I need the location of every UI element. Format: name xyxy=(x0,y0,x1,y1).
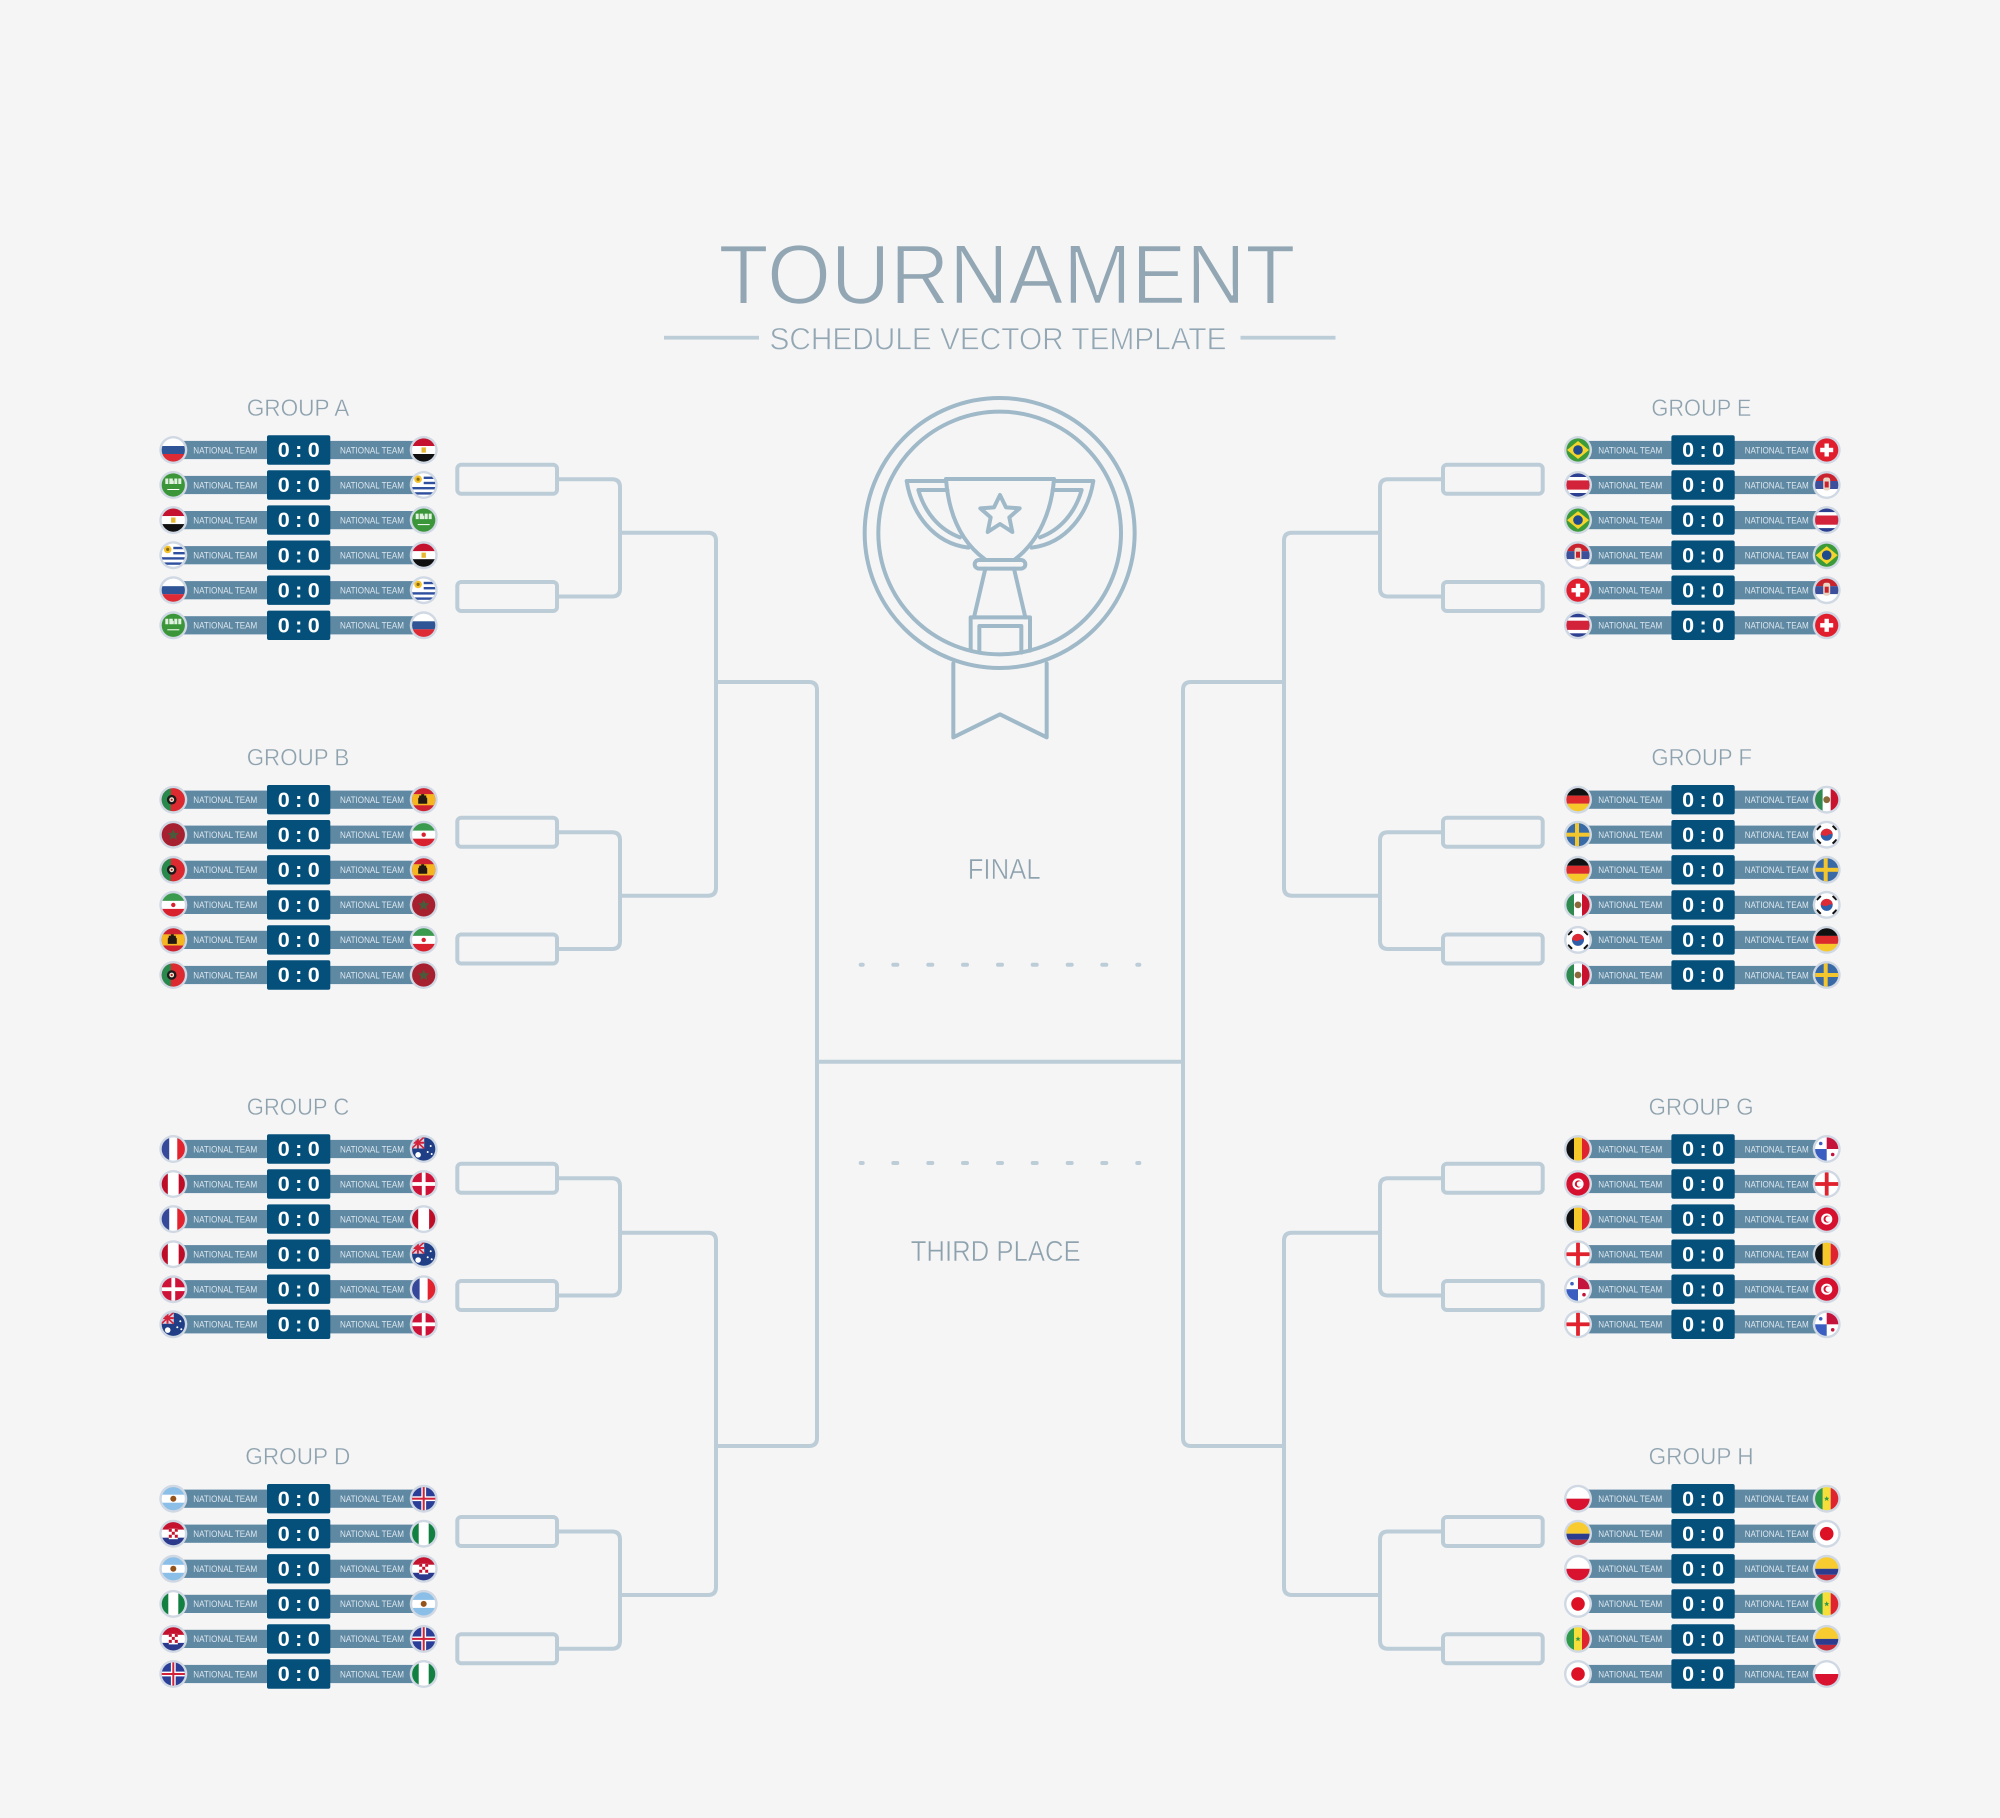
match row 2: NATIONAL TEAM xyxy=(1598,830,1662,840)
match row 2: NATIONAL TEAM xyxy=(193,480,257,490)
match row 6: NATIONAL TEAM xyxy=(1745,1669,1809,1679)
match row 5: 0 : 0 xyxy=(1682,578,1724,602)
match row 2: NATIONAL TEAM xyxy=(193,1529,257,1539)
match row 2 xyxy=(1564,1169,1841,1199)
match row 2: NATIONAL TEAM xyxy=(1598,1529,1662,1539)
match row 1: NATIONAL TEAM xyxy=(340,1144,404,1154)
match row 2: NATIONAL TEAM xyxy=(1745,480,1809,490)
match row 6: 0 : 0 xyxy=(1682,1662,1724,1686)
match row 6: NATIONAL TEAM xyxy=(340,1669,404,1679)
panel: group D xyxy=(159,1444,438,1689)
match row 5: NATIONAL TEAM xyxy=(1598,1634,1662,1644)
match row 2: 0 : 0 xyxy=(1682,1172,1724,1196)
match row 3: 0 : 0 xyxy=(1682,508,1724,532)
heading: group A: GROUP A xyxy=(247,395,349,422)
match row 5: NATIONAL TEAM xyxy=(1745,1634,1809,1644)
match row 3 xyxy=(159,855,438,884)
match row 2: NATIONAL TEAM xyxy=(1745,1529,1809,1539)
panel: group A xyxy=(159,395,438,640)
match row 1: NATIONAL TEAM xyxy=(1745,445,1809,455)
heading: group C: GROUP C xyxy=(247,1094,349,1121)
match row 1: 0 : 0 xyxy=(1682,1137,1724,1161)
match row 6: NATIONAL TEAM xyxy=(1598,621,1662,631)
match row 1: NATIONAL TEAM xyxy=(1598,1494,1662,1504)
match row 6: NATIONAL TEAM xyxy=(340,621,404,631)
match row 5: NATIONAL TEAM xyxy=(340,1284,404,1294)
match row 5: 0 : 0 xyxy=(278,1627,320,1651)
icon: trophy medal xyxy=(865,398,1135,737)
match row 3 xyxy=(1564,1204,1841,1234)
match row 1: 0 : 0 xyxy=(1682,438,1724,462)
match row 6: 0 : 0 xyxy=(278,613,320,637)
match row 2: NATIONAL TEAM xyxy=(340,480,404,490)
match row 4: 0 : 0 xyxy=(278,1242,320,1266)
match row 5 xyxy=(159,1624,438,1654)
match row 3: 0 : 0 xyxy=(1682,1207,1724,1231)
panel: group G xyxy=(1564,1094,1841,1339)
match row 3: 0 : 0 xyxy=(278,508,320,532)
match row 2: NATIONAL TEAM xyxy=(340,1179,404,1189)
match row 1: 0 : 0 xyxy=(1682,788,1724,812)
match row 4: NATIONAL TEAM xyxy=(340,550,404,560)
match row 4: 0 : 0 xyxy=(278,543,320,567)
match row 3 xyxy=(159,505,438,535)
match row 2: 0 : 0 xyxy=(278,473,320,497)
heading: group G: GROUP G xyxy=(1649,1094,1754,1121)
match row 5: NATIONAL TEAM xyxy=(340,585,404,595)
match row 5: NATIONAL TEAM xyxy=(1745,935,1809,945)
match row 4 xyxy=(1564,540,1841,570)
match row 3: NATIONAL TEAM xyxy=(1745,1564,1809,1574)
match row 5: NATIONAL TEAM xyxy=(1745,1284,1809,1294)
match row 6: NATIONAL TEAM xyxy=(340,1320,404,1330)
match row 3: NATIONAL TEAM xyxy=(1745,865,1809,875)
match row 1: NATIONAL TEAM xyxy=(193,795,257,805)
match row 5: NATIONAL TEAM xyxy=(1598,1284,1662,1294)
match row 4: 0 : 0 xyxy=(278,893,320,917)
match row 1 xyxy=(1564,435,1841,465)
match row 1: NATIONAL TEAM xyxy=(193,1494,257,1504)
heading: group B: GROUP B xyxy=(247,745,349,772)
match row 5: NATIONAL TEAM xyxy=(340,935,404,945)
match row 6: NATIONAL TEAM xyxy=(340,970,404,980)
match row 5: NATIONAL TEAM xyxy=(193,935,257,945)
match row 3: 0 : 0 xyxy=(1682,858,1724,882)
match row 2 xyxy=(159,1169,438,1199)
panel: group C xyxy=(159,1094,438,1339)
match row 4: NATIONAL TEAM xyxy=(1598,1249,1662,1259)
match row 6 xyxy=(159,960,438,990)
final dotted line xyxy=(861,963,1139,967)
match row 5: NATIONAL TEAM xyxy=(1598,935,1662,945)
match row 6: 0 : 0 xyxy=(1682,1312,1724,1336)
match row 3: NATIONAL TEAM xyxy=(193,1214,257,1224)
match row 2: 0 : 0 xyxy=(278,1522,320,1546)
match row 6: 0 : 0 xyxy=(278,1662,320,1686)
match row 4 xyxy=(1564,1589,1841,1619)
match row 3: 0 : 0 xyxy=(278,1207,320,1231)
panel: group F xyxy=(1564,745,1841,990)
third place dotted line xyxy=(861,1161,1139,1165)
match row 3: NATIONAL TEAM xyxy=(193,515,257,525)
match row 1: NATIONAL TEAM xyxy=(1745,1144,1809,1154)
match row 6: NATIONAL TEAM xyxy=(193,1320,257,1330)
match row 2: 0 : 0 xyxy=(1682,473,1724,497)
match row 4: NATIONAL TEAM xyxy=(340,900,404,910)
label: FINAL: FINAL xyxy=(968,854,1041,886)
match row 2: 0 : 0 xyxy=(278,1172,320,1196)
match row 3 xyxy=(1564,505,1841,535)
match row 5: 0 : 0 xyxy=(278,578,320,602)
match row 6: NATIONAL TEAM xyxy=(193,1669,257,1679)
match row 2 xyxy=(159,820,438,849)
match row 1: NATIONAL TEAM xyxy=(1745,795,1809,805)
match row 6 xyxy=(1564,960,1841,990)
match row 6 xyxy=(159,1310,438,1339)
match row 2: NATIONAL TEAM xyxy=(193,830,257,840)
match row 3: NATIONAL TEAM xyxy=(340,865,404,875)
match row 4: NATIONAL TEAM xyxy=(193,550,257,560)
match row 3: NATIONAL TEAM xyxy=(193,1564,257,1574)
match row 1: NATIONAL TEAM xyxy=(340,1494,404,1504)
match row 6: NATIONAL TEAM xyxy=(1745,1320,1809,1330)
match row 5: NATIONAL TEAM xyxy=(193,585,257,595)
match row 1: 0 : 0 xyxy=(278,788,320,812)
match row 2: NATIONAL TEAM xyxy=(1598,480,1662,490)
match row 4: NATIONAL TEAM xyxy=(193,900,257,910)
match row 4: NATIONAL TEAM xyxy=(1745,900,1809,910)
match row 1: 0 : 0 xyxy=(278,1137,320,1161)
match row 4 xyxy=(159,890,438,920)
match row 4: NATIONAL TEAM xyxy=(1598,900,1662,910)
match row 2: 0 : 0 xyxy=(278,823,320,847)
match row 1: NATIONAL TEAM xyxy=(1598,795,1662,805)
match row 6: NATIONAL TEAM xyxy=(1598,970,1662,980)
match row 1: NATIONAL TEAM xyxy=(193,445,257,455)
match row 6: 0 : 0 xyxy=(278,1312,320,1336)
match row 6 xyxy=(159,611,438,640)
match row 5 xyxy=(1564,1624,1841,1654)
match row 2: 0 : 0 xyxy=(1682,823,1724,847)
match row 5: 0 : 0 xyxy=(1682,1627,1724,1651)
match row 1: NATIONAL TEAM xyxy=(1745,1494,1809,1504)
match row 3: 0 : 0 xyxy=(278,1557,320,1581)
match row 3: NATIONAL TEAM xyxy=(193,865,257,875)
match row 4: NATIONAL TEAM xyxy=(1598,550,1662,560)
match row 3: NATIONAL TEAM xyxy=(1598,1564,1662,1574)
panel: group H xyxy=(1564,1444,1841,1689)
subtitle with side rules: SCHEDULE VECTOR TEMPLATE xyxy=(770,320,1226,356)
match row 1: NATIONAL TEAM xyxy=(1598,1144,1662,1154)
heading: group F: GROUP F xyxy=(1651,745,1752,772)
panel: group B xyxy=(159,745,438,990)
match row 2 xyxy=(1564,820,1841,849)
match row 6: 0 : 0 xyxy=(1682,963,1724,987)
match row 3: NATIONAL TEAM xyxy=(1598,865,1662,875)
match row 4: 0 : 0 xyxy=(1682,893,1724,917)
match row 1: NATIONAL TEAM xyxy=(340,795,404,805)
match row 5: 0 : 0 xyxy=(278,1277,320,1301)
match row 3: NATIONAL TEAM xyxy=(340,515,404,525)
match row 4: NATIONAL TEAM xyxy=(1745,1249,1809,1259)
match row 2: 0 : 0 xyxy=(1682,1522,1724,1546)
match row 3 xyxy=(159,1204,438,1234)
match row 1 xyxy=(159,1134,438,1164)
match row 1 xyxy=(1564,1134,1841,1164)
match row 2: NATIONAL TEAM xyxy=(193,1179,257,1189)
heading: group H: GROUP H xyxy=(1649,1444,1754,1471)
match row 5 xyxy=(159,1274,438,1304)
match row 4: 0 : 0 xyxy=(278,1592,320,1616)
match row 2: NATIONAL TEAM xyxy=(1745,830,1809,840)
match row 6: NATIONAL TEAM xyxy=(193,621,257,631)
match row 5: NATIONAL TEAM xyxy=(193,1634,257,1644)
match row 5: 0 : 0 xyxy=(1682,928,1724,952)
match row 3: NATIONAL TEAM xyxy=(340,1214,404,1224)
heading: group E: GROUP E xyxy=(1651,395,1751,422)
match row 5: NATIONAL TEAM xyxy=(193,1284,257,1294)
match row 1: 0 : 0 xyxy=(1682,1487,1724,1511)
match row 5: NATIONAL TEAM xyxy=(340,1634,404,1644)
match row 4 xyxy=(159,1240,438,1269)
match row 2: NATIONAL TEAM xyxy=(340,830,404,840)
match row 4: 0 : 0 xyxy=(1682,543,1724,567)
match row 6: NATIONAL TEAM xyxy=(193,970,257,980)
match row 2 xyxy=(1564,470,1841,500)
match row 1: 0 : 0 xyxy=(278,1487,320,1511)
match row 4: 0 : 0 xyxy=(1682,1242,1724,1266)
match row 2 xyxy=(159,1519,438,1548)
match row 6: NATIONAL TEAM xyxy=(1745,970,1809,980)
match row 2 xyxy=(1564,1519,1841,1548)
match row 2: NATIONAL TEAM xyxy=(340,1529,404,1539)
match row 6: NATIONAL TEAM xyxy=(1745,621,1809,631)
match row 1 xyxy=(159,435,438,465)
match row 5 xyxy=(159,925,438,955)
match row 4: NATIONAL TEAM xyxy=(1598,1599,1662,1609)
match row 1 xyxy=(1564,1484,1841,1513)
match row 3: NATIONAL TEAM xyxy=(340,1564,404,1574)
match row 1: 0 : 0 xyxy=(278,438,320,462)
match row 4 xyxy=(1564,890,1841,920)
match row 6 xyxy=(1564,611,1841,640)
match row 1 xyxy=(159,785,438,814)
bracket: right side xyxy=(1183,465,1543,1663)
match row 3 xyxy=(1564,1554,1841,1584)
match row 3: NATIONAL TEAM xyxy=(1745,1214,1809,1224)
match row 5 xyxy=(1564,925,1841,955)
match row 4: NATIONAL TEAM xyxy=(1745,1599,1809,1609)
panel: group E xyxy=(1564,395,1841,640)
match row 1 xyxy=(159,1484,438,1513)
label: THIRD PLACE: THIRD PLACE xyxy=(911,1236,1081,1268)
match row 6: 0 : 0 xyxy=(1682,613,1724,637)
bracket: center final line xyxy=(815,1060,1185,1064)
match row 4: NATIONAL TEAM xyxy=(1745,550,1809,560)
match row 4 xyxy=(159,1589,438,1619)
match row 5: 0 : 0 xyxy=(1682,1277,1724,1301)
match row 5: NATIONAL TEAM xyxy=(1745,585,1809,595)
match row 4 xyxy=(159,540,438,570)
match row 1: NATIONAL TEAM xyxy=(340,445,404,455)
heading: group D: GROUP D xyxy=(245,1444,350,1471)
match row 6: 0 : 0 xyxy=(278,963,320,987)
match row 6: NATIONAL TEAM xyxy=(1598,1320,1662,1330)
match row 3 xyxy=(159,1554,438,1584)
match row 5 xyxy=(1564,576,1841,605)
title: TOURNAMENT: TOURNAMENT xyxy=(718,227,1296,321)
match row 6: NATIONAL TEAM xyxy=(1598,1669,1662,1679)
match row 5: NATIONAL TEAM xyxy=(1598,585,1662,595)
match row 5 xyxy=(1564,1274,1841,1304)
match row 3: NATIONAL TEAM xyxy=(1598,515,1662,525)
match row 3: NATIONAL TEAM xyxy=(1745,515,1809,525)
match row 3 xyxy=(1564,855,1841,884)
match row 2: NATIONAL TEAM xyxy=(1745,1179,1809,1189)
match row 1: NATIONAL TEAM xyxy=(193,1144,257,1154)
match row 6 xyxy=(1564,1659,1841,1689)
match row 5: 0 : 0 xyxy=(278,928,320,952)
match row 4: NATIONAL TEAM xyxy=(193,1249,257,1259)
match row 3: 0 : 0 xyxy=(1682,1557,1724,1581)
match row 2 xyxy=(159,470,438,500)
match row 1 xyxy=(1564,785,1841,814)
match row 4: NATIONAL TEAM xyxy=(340,1249,404,1259)
match row 3: 0 : 0 xyxy=(278,858,320,882)
match row 6 xyxy=(159,1659,438,1689)
match row 4: NATIONAL TEAM xyxy=(193,1599,257,1609)
match row 5 xyxy=(159,576,438,605)
bracket: left side xyxy=(457,465,817,1663)
match row 4 xyxy=(1564,1240,1841,1269)
match row 1: NATIONAL TEAM xyxy=(1598,445,1662,455)
match row 4: NATIONAL TEAM xyxy=(340,1599,404,1609)
match row 4: 0 : 0 xyxy=(1682,1592,1724,1616)
match row 3: NATIONAL TEAM xyxy=(1598,1214,1662,1224)
match row 2: NATIONAL TEAM xyxy=(1598,1179,1662,1189)
match row 6 xyxy=(1564,1310,1841,1339)
